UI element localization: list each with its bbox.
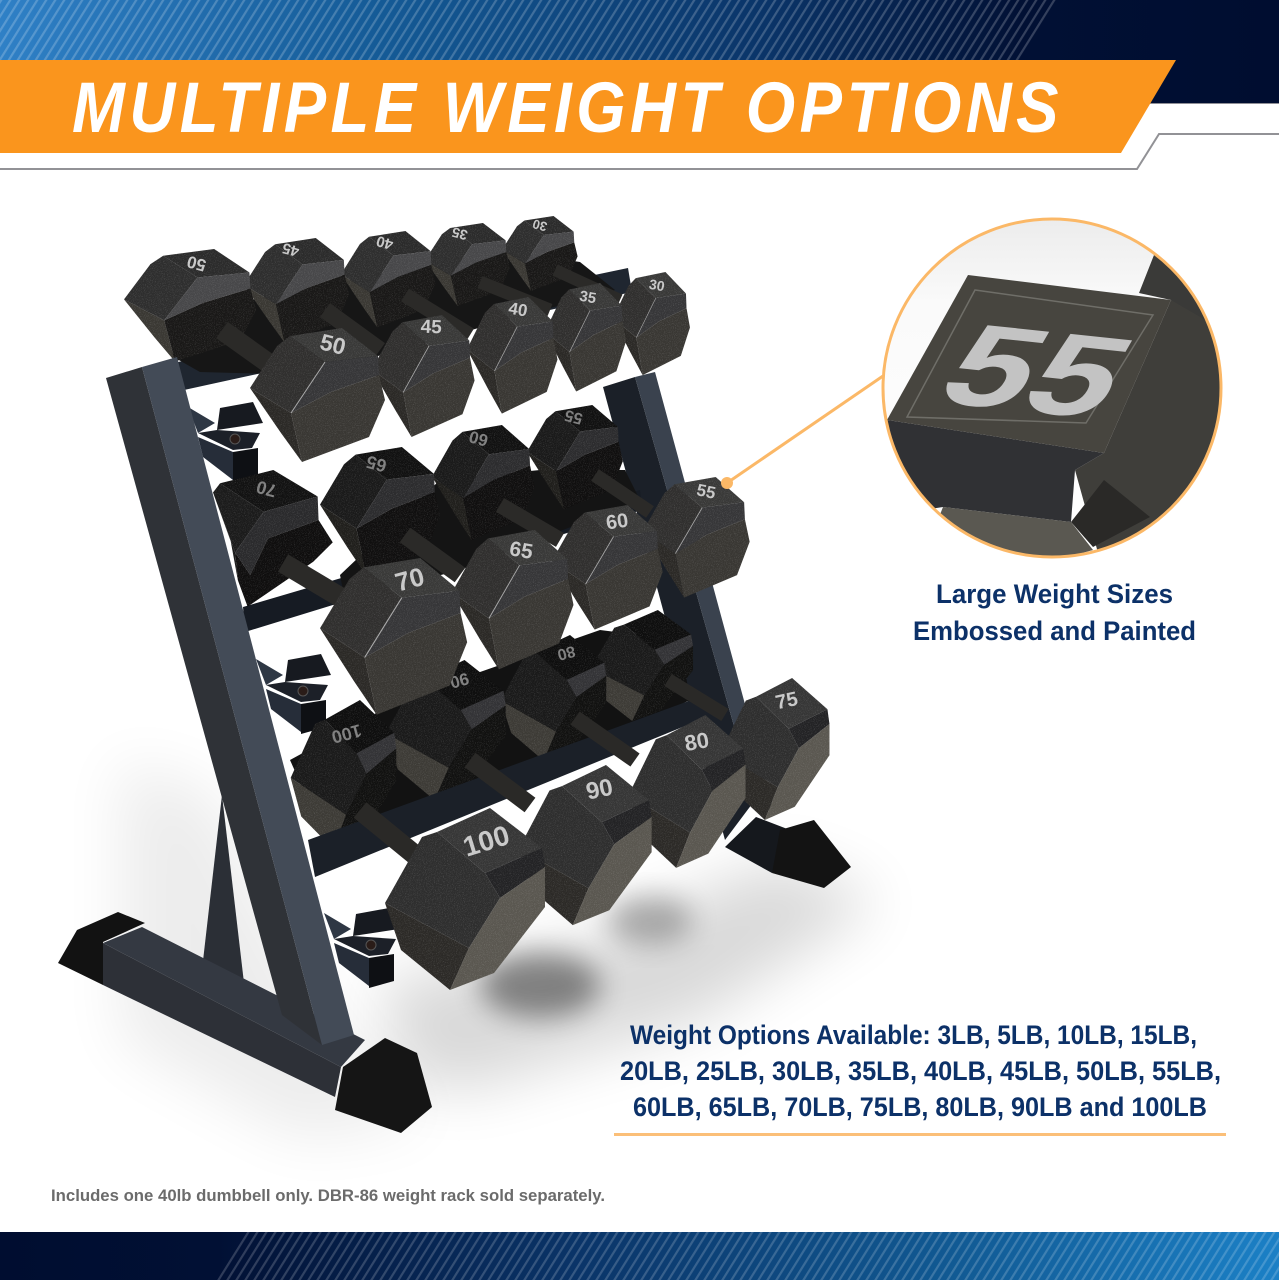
dumbbells: lower tier handles	[360, 680, 725, 855]
rack: rear upright and foot	[603, 372, 851, 888]
weight options text: Weight Options Available: 3LB, 5LB, 10LB, 15LB,	[630, 1020, 1197, 1050]
dark mass behind top tier	[170, 250, 615, 375]
dark mass behind middle tier	[340, 470, 640, 600]
floor shadow	[120, 760, 880, 1140]
dumbbells: middle tier rear heads: 65	[364, 452, 389, 476]
callout caption	[913, 579, 1196, 646]
dumbbells: middle tier rear heads	[213, 405, 623, 607]
weight number labels, top tier: 40	[507, 299, 529, 321]
dumbbells: top tier rear heads: 40	[375, 232, 395, 253]
dumbbells: lower tier rear heads: 80	[555, 642, 577, 663]
dumbbells: middle tier rear heads: 60	[467, 427, 490, 450]
rack: brackets	[188, 402, 399, 988]
weight number labels, middle tier: 65	[508, 537, 535, 564]
weight number labels, lower tier: 100	[459, 819, 513, 863]
rack: upper and middle rails	[178, 268, 642, 632]
bottom banner	[0, 1232, 1279, 1280]
title banner: MULTIPLE WEIGHT OPTIONS	[72, 69, 1063, 148]
rack: lower rail	[308, 695, 712, 877]
dumbbells: lower tier rear heads	[291, 610, 693, 849]
weight options text: 20LB, 25LB, 30LB, 35LB, 40LB, 45LB, 50LB, 55LB,	[620, 1056, 1221, 1086]
top banner background	[0, 0, 1279, 104]
footnote: Includes one 40lb dumbbell only. DBR-86 weight rack sold separately.	[51, 1187, 605, 1205]
dumbbells: lower tier rear heads: 100	[329, 720, 364, 747]
dumbbells: top tier rear heads: 45	[281, 239, 301, 260]
dumbbells: top tier rear heads: 30	[531, 216, 549, 234]
weight number labels, top tier: 35	[578, 288, 597, 307]
weight number labels, lower tier: 80	[682, 727, 711, 756]
dark mass behind lower tier	[290, 630, 690, 850]
weight number labels, top tier: 45	[420, 317, 443, 338]
callout: zoomed 55 detail	[882, 218, 1222, 558]
weight number labels, middle tier	[392, 480, 717, 598]
callout leader line	[721, 376, 883, 489]
weight number labels, top tier: 30	[648, 276, 666, 294]
dumbbells: top tier handles	[222, 270, 620, 375]
callout caption: Large Weight Sizes	[936, 579, 1173, 609]
dumbbells: lower tier rear heads: 90	[448, 669, 471, 692]
dumbbells: middle tier rear heads: 55	[563, 406, 585, 427]
dumbbells: middle tier rear heads: 70	[254, 477, 279, 501]
dumbbells: top tier front heads	[250, 272, 690, 462]
weight number labels, lower tier: 75	[774, 688, 800, 714]
weight number labels, middle tier: 55	[695, 480, 717, 503]
weight number labels, middle tier: 70	[392, 561, 428, 598]
weight options text: 60LB, 65LB, 70LB, 75LB, 80LB, 90LB and 100LB	[633, 1092, 1207, 1122]
title banner	[0, 60, 1279, 169]
callout caption: Embossed and Painted	[913, 616, 1196, 646]
dumbbells: lower tier front heads	[385, 678, 829, 990]
dumbbells: top tier rear heads	[124, 216, 578, 362]
dumbbells: top tier rear heads: 35	[450, 224, 469, 244]
callout: zoomed 55 detail: 55	[918, 299, 1156, 442]
rack: base and front upright	[58, 357, 432, 1133]
dumbbells: middle tier handles	[283, 475, 650, 600]
weight options text	[614, 1020, 1226, 1136]
weight number labels, top tier	[317, 276, 666, 360]
weight number labels, lower tier	[459, 688, 800, 863]
dumbbells: top tier rear heads: 50	[185, 252, 208, 275]
dumbbells: middle tier front heads	[320, 477, 750, 715]
weight number labels, lower tier: 90	[584, 774, 615, 806]
weight number labels, middle tier: 60	[605, 510, 630, 534]
weight number labels, top tier: 50	[317, 329, 348, 360]
